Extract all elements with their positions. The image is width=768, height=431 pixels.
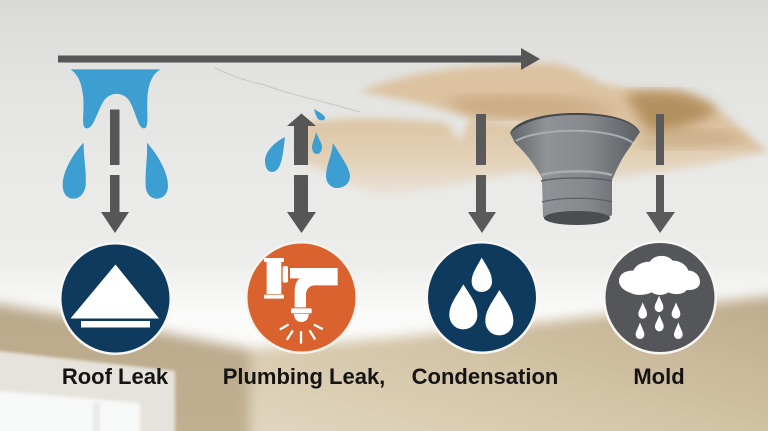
icon: roof <box>70 264 159 328</box>
label: plumbing leak: Plumbing Leak, <box>223 364 385 389</box>
hairline crack <box>215 68 360 112</box>
dashed arrow: mold <box>646 114 675 233</box>
stain: lower left lobe <box>300 118 768 196</box>
icon: pipe <box>264 258 338 343</box>
label: roof leak: Roof Leak <box>62 364 169 389</box>
icon: rain cloud <box>619 256 700 339</box>
dashed arrow: roof leak <box>101 110 129 233</box>
badge: condensation <box>426 241 538 354</box>
dashed arrow: condensation <box>468 114 496 233</box>
label: condensation: Condensation <box>412 364 558 389</box>
badge: roof leak <box>59 242 172 355</box>
water stain on ceiling <box>215 63 768 196</box>
badge: mold <box>603 240 717 354</box>
label: mold: Mold <box>633 364 685 389</box>
window <box>0 350 175 431</box>
top horizontal arrow <box>58 48 540 70</box>
icon: three drops <box>449 258 513 335</box>
stain: speckled band <box>445 95 620 119</box>
badge: plumbing leak <box>245 241 358 354</box>
double arrow: plumbing leak <box>287 114 316 233</box>
stain: upper lobe <box>360 63 768 152</box>
stain: dark core right of fitting <box>625 91 718 132</box>
metal ceiling fitting <box>510 113 640 225</box>
icon: plumbing leak water drops <box>265 109 350 188</box>
icon: roof leak water drips <box>63 69 168 199</box>
